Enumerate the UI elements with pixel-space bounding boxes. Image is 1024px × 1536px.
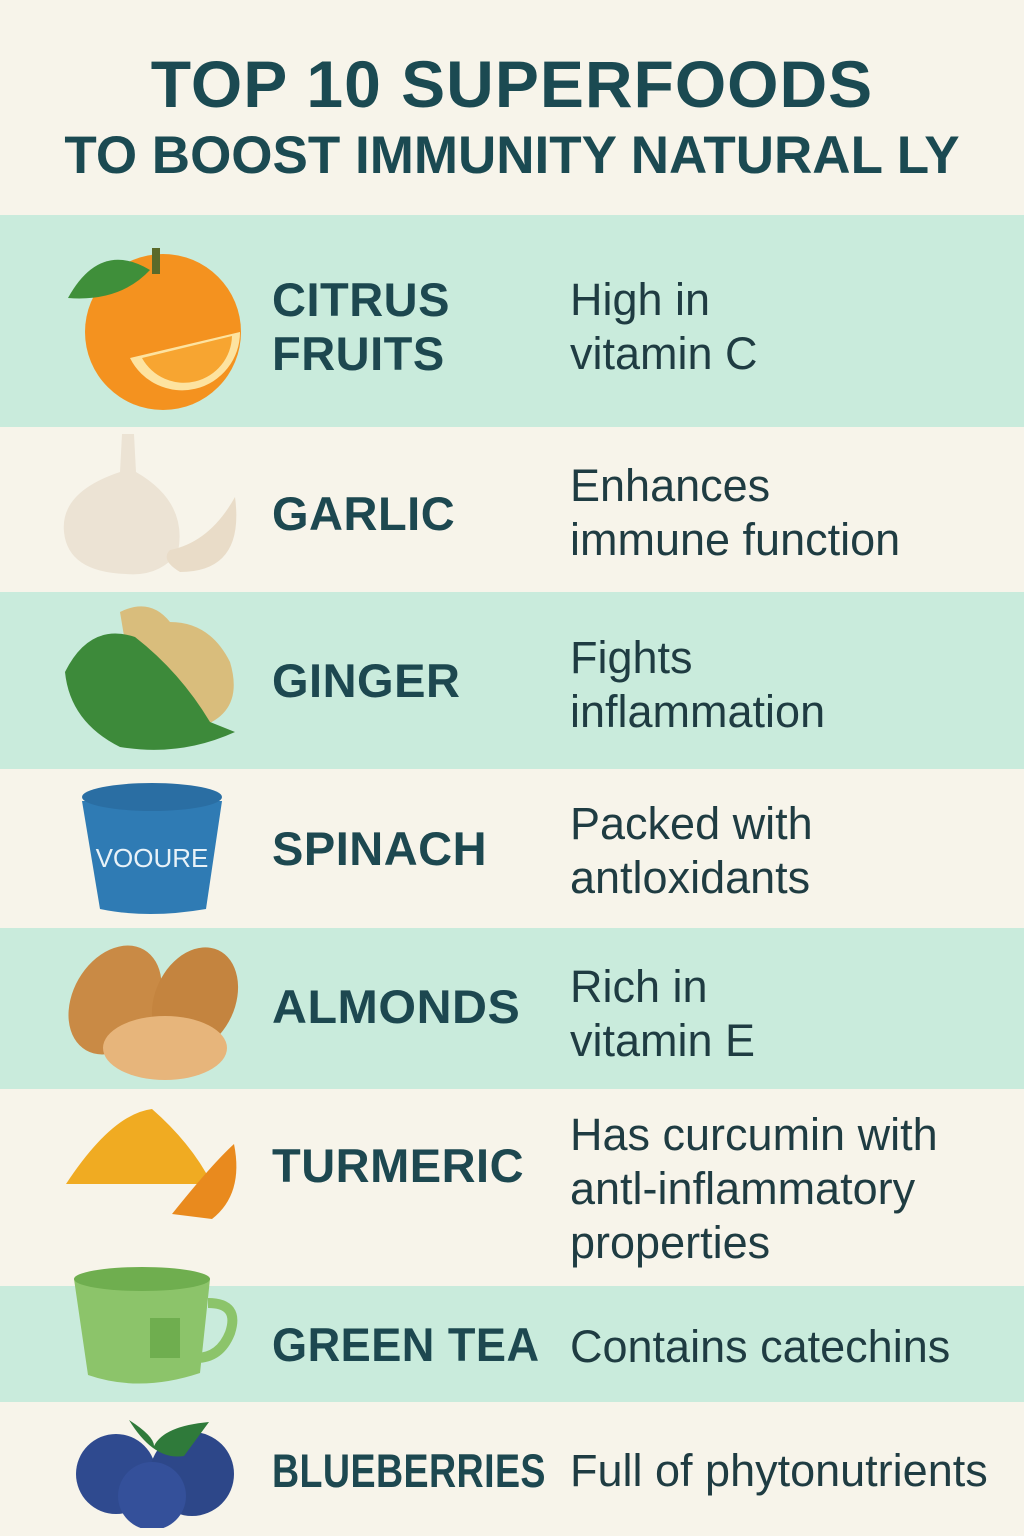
row: citrus fruits [0,215,1024,427]
description: Enhances [570,460,770,511]
name: SPINACH [272,822,487,875]
name: BLUEBERRIES [272,1444,546,1497]
name: FRUITS [272,327,445,380]
description: antl-inflammatory [570,1163,915,1214]
description: vitamin E [570,1015,755,1066]
description: Contains catechins [570,1321,950,1372]
description [570,460,900,565]
description [570,961,755,1066]
description [570,798,813,903]
description [570,1109,938,1268]
name: GINGER [272,654,460,707]
name: GREEN TEA [272,1318,540,1371]
name: ALMONDS [272,980,520,1033]
row: green tea [0,1286,1024,1402]
name: TURMERIC [272,1139,524,1192]
row: turmeric [0,1089,1024,1286]
description: immune function [570,514,900,565]
row: ginger [0,592,1024,769]
description: Has curcumin with [570,1109,938,1160]
description: High in [570,274,710,325]
name [272,273,450,380]
description: properties [570,1217,770,1268]
description: Full of phytonutrients [570,1445,988,1496]
row: garlic [0,427,1024,592]
row: almonds [0,928,1024,1089]
icon: cup [82,783,222,914]
subtitle: TO BOOST IMMUNITY NATURAL LY [64,126,960,185]
description: inflammation [570,686,825,737]
icon: turmeric [66,1109,236,1219]
name: GARLIC [272,487,455,540]
description: vitamin C [570,328,758,379]
icon: almonds [68,946,238,1080]
description [570,274,758,379]
icon: green tea cup [74,1267,238,1384]
row: blueberries [0,1402,1024,1536]
icon: garlic [64,434,236,574]
title: TOP 10 SUPERFOODS [151,47,873,121]
description: antloxidants [570,852,810,903]
row: spinach [0,769,1024,928]
icon: cup: VOOURE [96,843,208,873]
name: CITRUS [272,273,450,326]
description: Packed with [570,798,813,849]
description [570,632,825,737]
description: Rich in [570,961,708,1012]
icon: orange [68,248,241,410]
description: Fights [570,632,693,683]
icon: ginger [65,606,235,750]
icon: blueberries [76,1420,234,1528]
